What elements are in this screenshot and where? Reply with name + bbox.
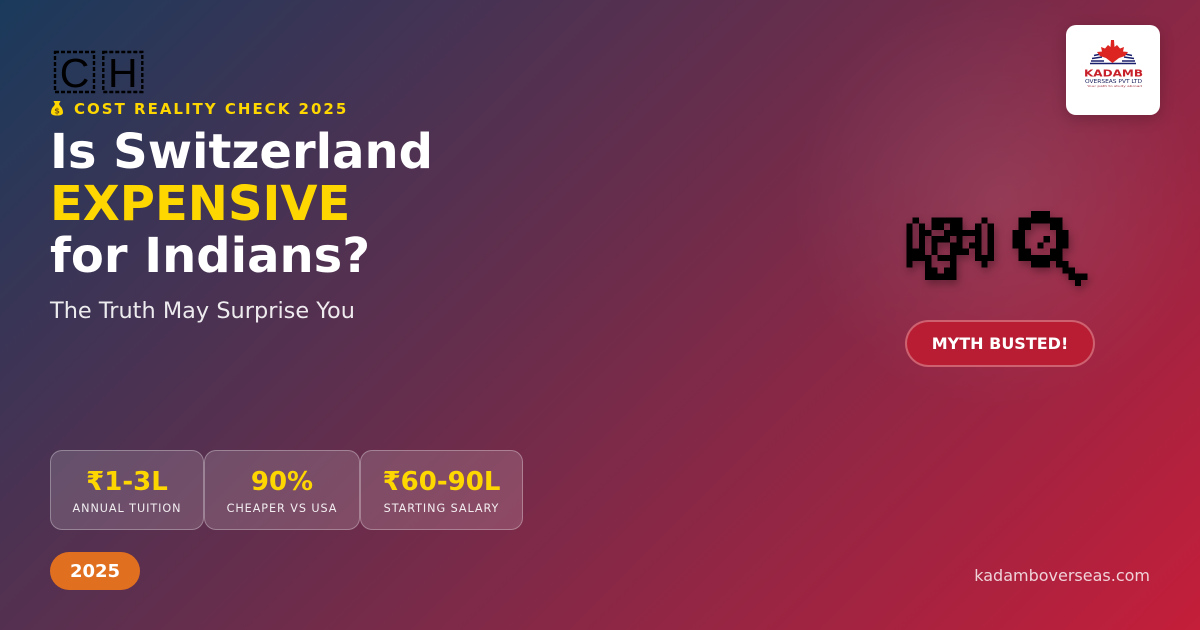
logo: KADAMB	[1084, 68, 1143, 80]
stat: cheaper vs USA: 90%	[251, 467, 313, 497]
stat: annual tuition: ANNUAL TUITION	[73, 502, 181, 515]
stat: starting salary: ₹60-90L	[383, 467, 500, 497]
title: for Indians?	[50, 228, 370, 284]
myth busted badge	[905, 320, 1095, 367]
logo: OVERSEAS PVT LTD	[1085, 79, 1142, 85]
title: Is Switzerland	[50, 124, 433, 180]
stat: cheaper vs USA	[204, 450, 360, 530]
title	[50, 124, 433, 284]
eyebrow label: COST REALITY CHECK 2025	[74, 100, 348, 118]
stat: starting salary: STARTING SALARY	[384, 502, 499, 515]
title: EXPENSIVE	[50, 176, 350, 232]
stat: annual tuition: ₹1-3L	[86, 467, 168, 497]
logo: Your path to study abroad	[1087, 84, 1142, 88]
logo	[1084, 40, 1143, 88]
myth busted badge: MYTH BUSTED!	[932, 334, 1068, 353]
stat: annual tuition	[50, 450, 204, 530]
icon: flying money	[905, 218, 1000, 288]
icon: money bag	[51, 101, 63, 116]
icon: magnifying glass	[1011, 211, 1092, 292]
year badge: 2025	[70, 561, 120, 582]
stat cards	[50, 450, 523, 530]
stat: cheaper vs USA: CHEAPER VS USA	[227, 502, 337, 515]
subtitle: The Truth May Surprise You	[50, 298, 355, 324]
stat: starting salary	[360, 450, 523, 530]
logo card	[1066, 25, 1160, 115]
year badge	[50, 552, 140, 590]
flag placeholder glyphs: C	[60, 50, 89, 96]
website: kadamboverseas.com	[974, 566, 1150, 585]
flag placeholder glyphs: H	[108, 50, 138, 96]
flag placeholder glyphs	[54, 50, 144, 96]
icon: money bag: $	[54, 106, 60, 116]
